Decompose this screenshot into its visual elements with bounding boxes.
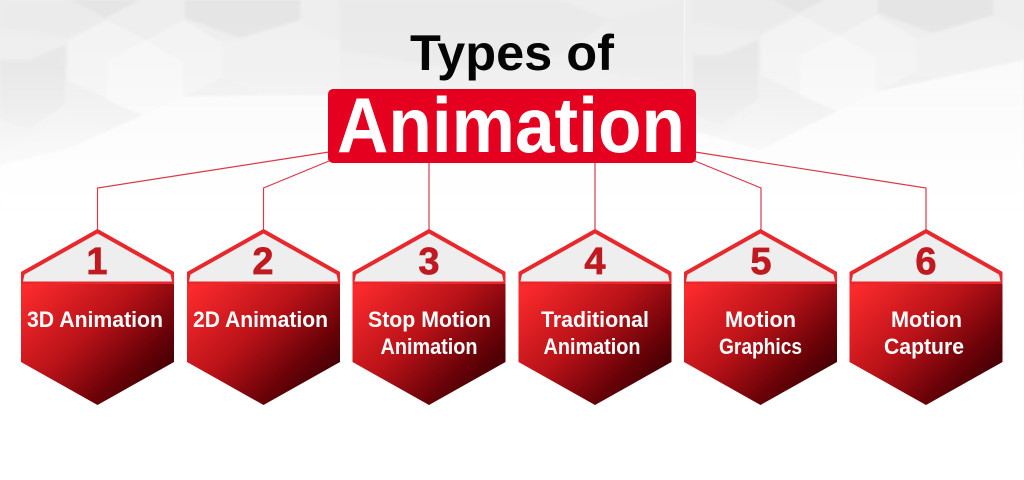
hexagon 6: Motion Capture: 6 [915, 241, 937, 283]
hexagon 4: Traditional Animation: Traditional [541, 307, 649, 332]
hexagon 3: Stop Motion Animation: 3 [418, 241, 440, 283]
hexagon 2: 2D Animation: 2 [252, 241, 274, 283]
hexagon 1: 3D Animation: 1 [86, 241, 108, 283]
title banner: Animation: Animation [337, 81, 685, 169]
hexagon 5: Motion Graphics [684, 229, 837, 405]
hexagon 2: 2D Animation: 2D Animation [193, 307, 328, 332]
hexagon 6: Motion Capture: Motion [891, 307, 962, 332]
hexagon 6: Motion Capture: Capture [884, 334, 964, 359]
hexagon 1: 3D Animation [21, 229, 174, 405]
hexagon 4: Traditional Animation [518, 229, 672, 405]
hexagon 4: Traditional Animation: Animation [544, 334, 640, 359]
hexagon 5: Motion Graphics: Graphics [719, 334, 802, 359]
hexagon 3: Stop Motion Animation: Animation [380, 334, 478, 359]
hexagon 4: Traditional Animation: 4 [584, 241, 606, 283]
hexagon 6: Motion Capture [850, 229, 1002, 405]
hexagon 2: 2D Animation [187, 229, 340, 405]
hexagon 3: Stop Motion Animation [352, 229, 506, 405]
hexagon 5: Motion Graphics: 5 [750, 241, 772, 283]
hexagon 1: 3D Animation: 3D Animation [27, 307, 163, 332]
hexagon 3: Stop Motion Animation: Stop Motion [368, 307, 491, 332]
hexagon 5: Motion Graphics: Motion [725, 307, 796, 332]
connector lines [98, 152, 926, 230]
title: Types of: Types of [410, 25, 614, 81]
